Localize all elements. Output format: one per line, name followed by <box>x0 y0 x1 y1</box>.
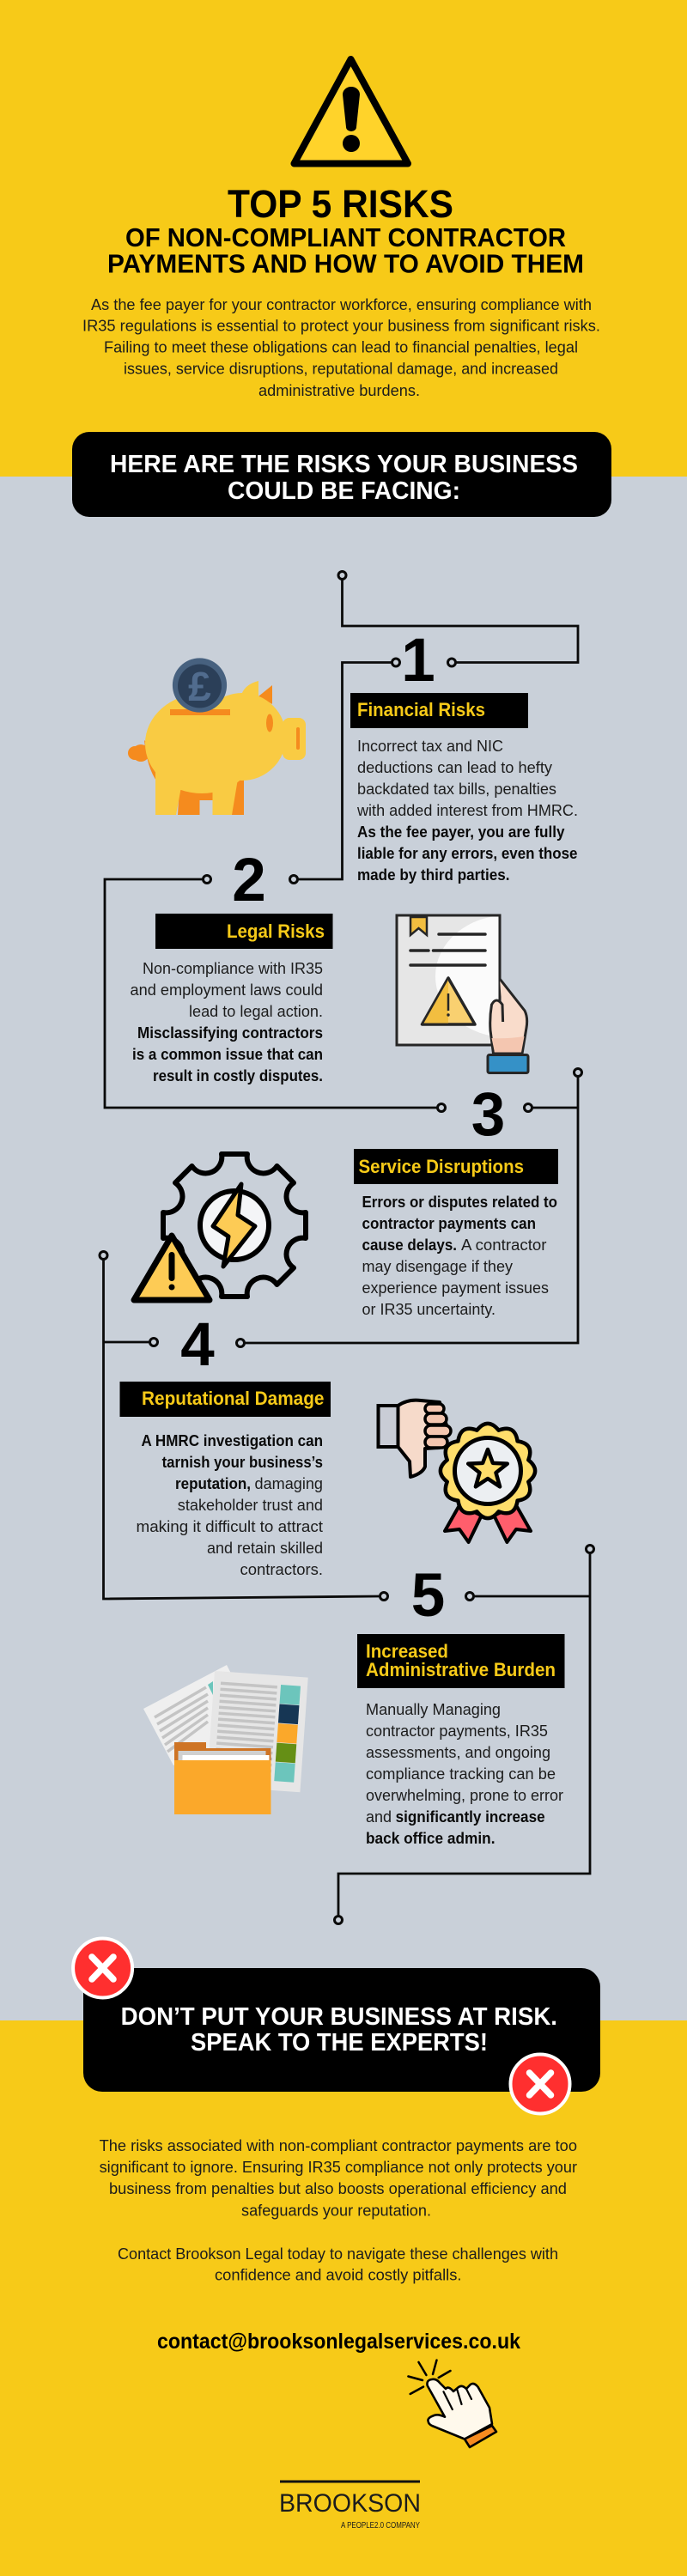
text: reputational damage body: stakeholder trust and <box>178 1497 323 1514</box>
text: service disruptions body: Errors or disputes related to <box>362 1194 557 1211</box>
text: financial risks body: made by third parties. <box>357 866 510 884</box>
text: reputational damage body: damaging <box>254 1475 323 1492</box>
contact paragraph <box>118 2245 558 2284</box>
text: service disruptions body <box>362 1194 557 1318</box>
panel: risk 5 administrative burden <box>143 1562 565 1847</box>
connector: number 1 to number 2 <box>290 659 400 883</box>
text: financial risks body: deductions can lead to hefty <box>357 759 552 776</box>
banner: call to action <box>83 1968 600 2092</box>
banner: risks heading: HERE ARE THE RISKS YOUR BUSINESS <box>110 451 578 478</box>
text: legal risks body: and employment laws could <box>131 981 323 999</box>
text: legal risks body: lead to legal action. <box>189 1003 323 1020</box>
heading: legal risks: Legal Risks <box>227 920 325 942</box>
text: service disruptions body: or IR35 uncertainty. <box>362 1301 495 1318</box>
title: OF NON-COMPLIANT CONTRACTOR <box>125 222 566 252</box>
title: TOP 5 RISKS <box>228 182 453 226</box>
text: service disruptions body: experience payment issues <box>362 1279 549 1297</box>
text: reputational damage body: and retain skilled <box>207 1540 323 1557</box>
closing paragraph <box>100 2137 577 2219</box>
connector: number 4 to number 5 <box>100 1252 388 1601</box>
closing paragraph: safeguards your reputation. <box>241 2202 431 2219</box>
icon: thumbs down <box>378 1400 451 1477</box>
title: PAYMENTS AND HOW TO AVOID THEM <box>107 249 584 278</box>
text: financial risks body: liable for any errors, even those <box>357 845 577 862</box>
text: financial risks body: with added interest from HMRC. <box>356 802 578 819</box>
intro paragraph <box>82 296 600 399</box>
text: reputational damage body: A HMRC investigation can <box>141 1432 323 1449</box>
banner: call to action: SPEAK TO THE EXPERTS! <box>191 2029 488 2057</box>
background: yellow header <box>0 0 687 477</box>
heading: service disruptions: Service Disruptions <box>359 1156 524 1177</box>
number 4: 4 <box>180 1311 215 1379</box>
number 3: 3 <box>471 1081 505 1149</box>
text: reputational damage body <box>136 1432 323 1578</box>
text: service disruptions body: cause delays. <box>362 1236 457 1254</box>
intro paragraph: As the fee payer for your contractor workforce, ensuring compliance with <box>91 296 592 313</box>
number 5: 5 <box>411 1562 445 1630</box>
intro paragraph: Failing to meet these obligations can lead to financial penalties, legal <box>104 338 578 355</box>
contact email: contact@brooksonlegalservices.co.uk <box>157 2330 520 2354</box>
icon: gear with lightning bolt and warning <box>134 1154 306 1300</box>
text: reputational damage body: making it difficult to attract <box>136 1518 323 1535</box>
background: yellow footer <box>0 2020 687 2576</box>
text: financial risks body: As the fee payer, you are fully <box>357 823 565 841</box>
icon: award rosette with star <box>441 1424 535 1542</box>
number 2: 2 <box>232 847 266 914</box>
icon: clicking hand <box>408 2360 496 2447</box>
panel: risk 1 financial <box>128 627 578 884</box>
closing paragraph: The risks associated with non-compliant contractor payments are too <box>100 2137 577 2154</box>
icon: warning triangle <box>294 59 408 163</box>
text: administrative burden body <box>366 1701 563 1847</box>
heading: reputational damage: Reputational Damage <box>142 1388 325 1409</box>
closing paragraph: significant to ignore. Ensuring IR35 compliance not only protects your <box>100 2159 577 2176</box>
heading: increased administrative burden <box>357 1634 565 1688</box>
connector: start to number 1 <box>338 572 578 666</box>
closing paragraph: business from penalties but also boosts operational efficiency and <box>109 2180 567 2197</box>
icon: red cross bottom right <box>510 2054 570 2114</box>
heading: legal risks <box>155 914 333 949</box>
number 1: 1 <box>401 627 435 695</box>
connector: number 5 to end <box>335 1546 594 1923</box>
text: financial risks body <box>356 738 578 884</box>
text: service disruptions body: may disengage if they <box>362 1258 513 1275</box>
text: reputational damage body: reputation, <box>175 1475 251 1492</box>
text: administrative burden body: significantly increase <box>396 1808 545 1826</box>
heading: financial risks: Financial Risks <box>357 699 485 720</box>
intro paragraph: administrative burdens. <box>258 382 420 399</box>
banner: call to action: DON’T PUT YOUR BUSINESS AT RISK. <box>121 2003 557 2031</box>
banner: risks heading <box>72 432 611 517</box>
text: service disruptions body: contractor payments can <box>362 1215 536 1232</box>
text: financial risks body: Incorrect tax and NIC <box>357 738 503 755</box>
banner: risks heading: COULD BE FACING: <box>228 477 460 505</box>
panel: risk 2 legal <box>131 858 529 1084</box>
text: administrative burden body: compliance tracking can be <box>366 1765 556 1783</box>
text: administrative burden body: back office admin. <box>366 1830 495 1847</box>
connector: number 3 to number 4 <box>237 1068 582 1346</box>
logo: brookson: BROOKSON <box>279 2489 421 2518</box>
text: administrative burden body: and <box>366 1808 392 1826</box>
text: reputational damage body: tarnish your business’s <box>162 1454 323 1471</box>
text: administrative burden body: Manually Managing <box>366 1701 501 1718</box>
icon: piggy bank with pound coin <box>128 658 306 815</box>
text: legal risks body: result in costly disputes. <box>153 1067 323 1084</box>
contact paragraph: confidence and avoid costly pitfalls. <box>215 2267 462 2284</box>
text: administrative burden body: overwhelming, prone to error <box>366 1787 563 1804</box>
text: administrative burden body: assessments, and ongoing <box>366 1744 550 1761</box>
icon: piggy bank with pound coin: £ <box>188 665 211 710</box>
icon: document with warning held in hand <box>395 914 529 1074</box>
background: grey risks section <box>0 477 687 2020</box>
text: legal risks body: Non-compliance with IR35 <box>143 960 323 977</box>
text: financial risks body: backdated tax bills, penalties <box>357 781 556 798</box>
text: reputational damage body: contractors. <box>240 1561 323 1578</box>
icon: red cross top left <box>73 1939 132 1997</box>
heading: increased administrative burden: Increased <box>366 1641 448 1662</box>
heading: service disruptions <box>354 1149 558 1184</box>
title <box>107 182 584 278</box>
text: administrative burden body: contractor payments, IR35 <box>366 1722 548 1740</box>
text: legal risks body: Misclassifying contractors <box>137 1024 323 1042</box>
text: legal risks body <box>131 960 323 1084</box>
heading: reputational damage <box>120 1382 331 1417</box>
intro paragraph: issues, service disruptions, reputational damage, and increased <box>124 361 558 378</box>
heading: increased administrative burden: Administrative Burden <box>366 1659 556 1680</box>
panel: risk 3 service disruptions <box>134 1081 558 1318</box>
logo: brookson <box>279 2480 421 2530</box>
icon: folder with documents <box>143 1665 308 1814</box>
intro paragraph: IR35 regulations is essential to protect your business from significant risks. <box>82 318 600 335</box>
logo: brookson: A PEOPLE2.0 COMPANY <box>341 2520 420 2530</box>
connector: number 2 to number 3 <box>105 876 445 1111</box>
contact paragraph: Contact Brookson Legal today to navigate these challenges with <box>118 2245 558 2263</box>
heading: financial risks <box>350 693 528 728</box>
panel: risk 4 reputational damage <box>120 1311 535 1578</box>
text: service disruptions body: A contractor <box>461 1236 547 1254</box>
text: legal risks body: is a common issue that can <box>132 1046 323 1063</box>
